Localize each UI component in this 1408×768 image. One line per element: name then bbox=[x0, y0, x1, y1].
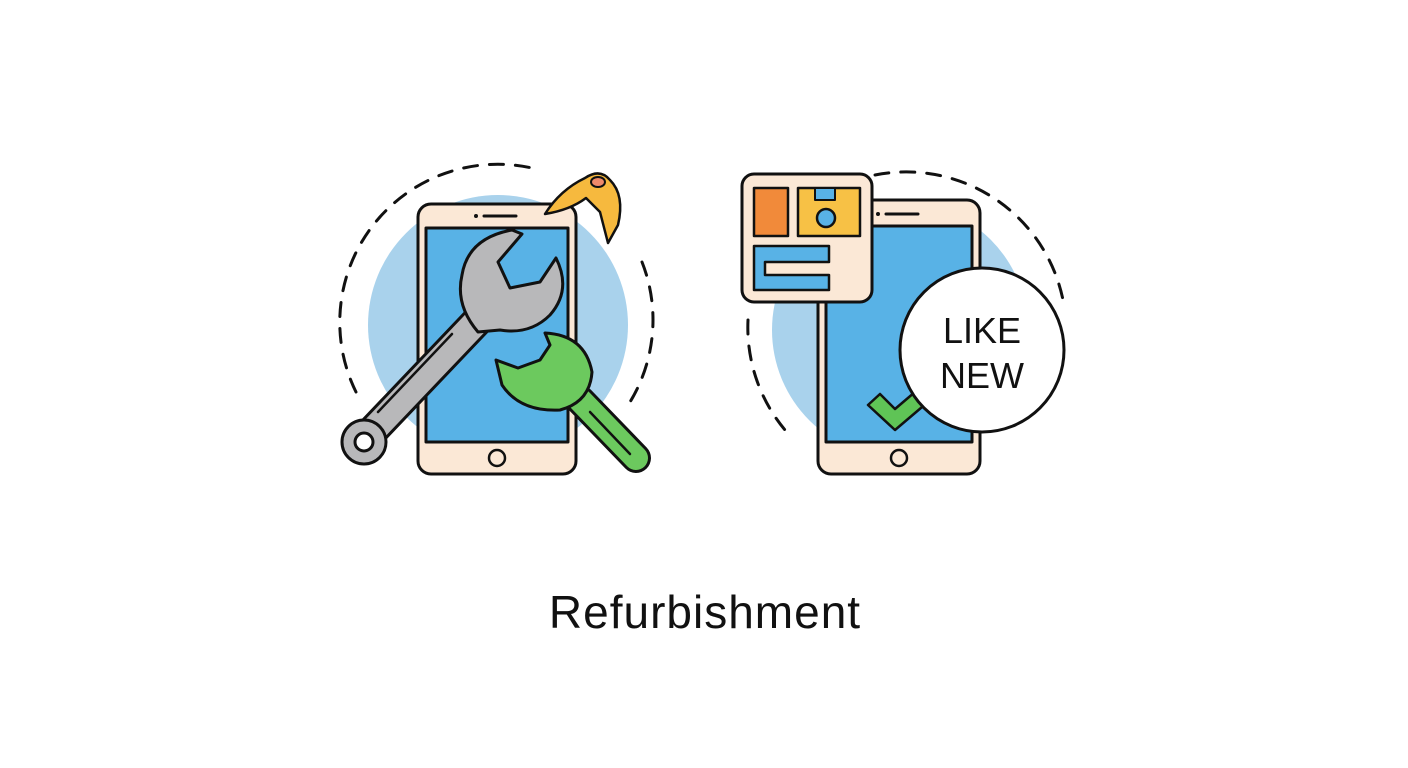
panel: repair icon bbox=[340, 164, 653, 474]
callout: like new badge: LIKE bbox=[943, 310, 1021, 351]
icon: phone left bbox=[418, 204, 576, 474]
icon: phone right bbox=[818, 200, 980, 474]
callout: like new badge: NEW bbox=[940, 355, 1024, 396]
icon: yellow tool bbox=[545, 173, 620, 243]
icon: green wrench bbox=[496, 333, 636, 458]
panel: like new icon bbox=[742, 172, 1064, 474]
icon: checkmark bbox=[868, 386, 935, 430]
icon: gray wrench bbox=[342, 230, 563, 464]
callout: like new badge bbox=[900, 268, 1064, 432]
icon: card bbox=[742, 174, 872, 302]
title: Refurbishment bbox=[549, 586, 861, 638]
